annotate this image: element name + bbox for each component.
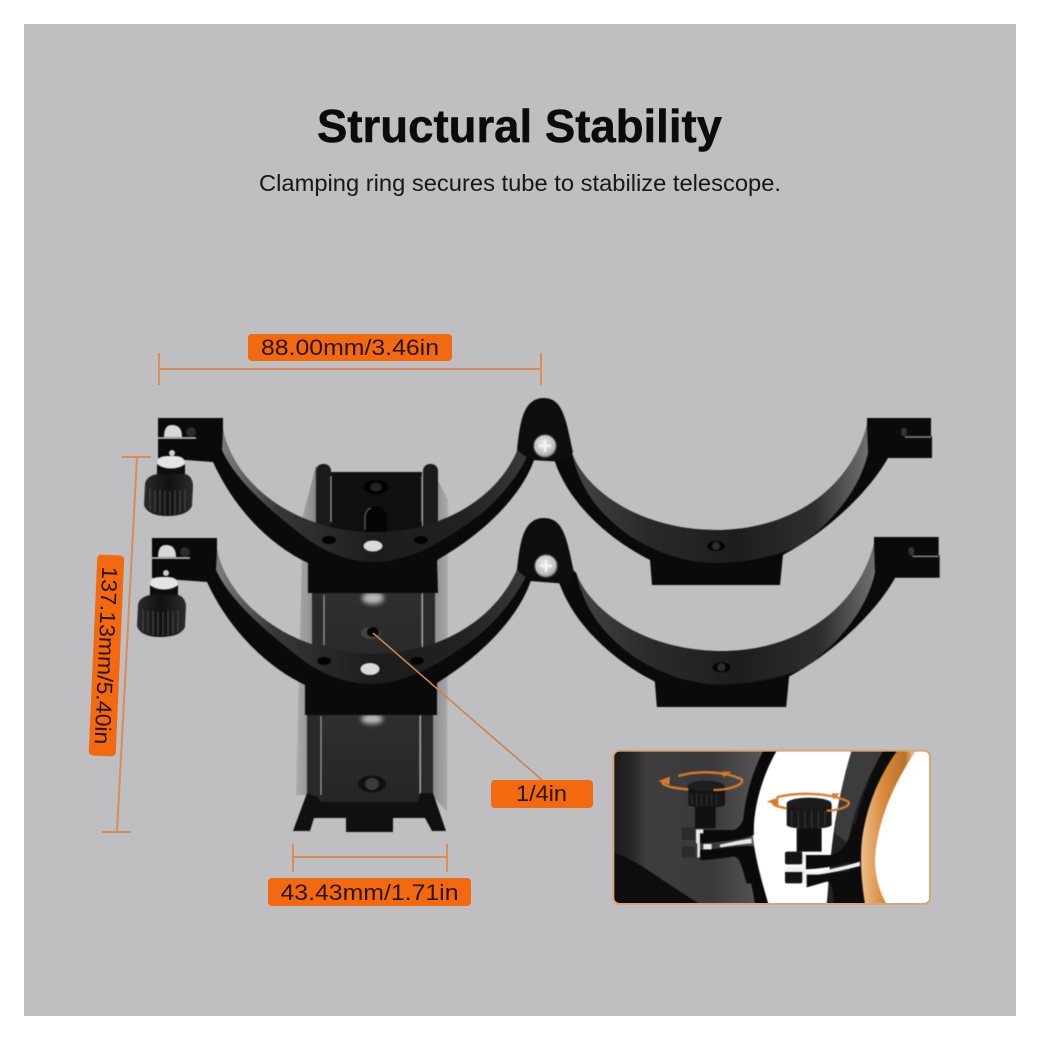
rotation arrow: right knob bbox=[767, 793, 849, 811]
ring left half bbox=[158, 418, 535, 593]
mount left side face bbox=[296, 466, 322, 795]
telescope mounting base bbox=[293, 464, 448, 832]
dimension: width 88.00mm: 88.00mm/3.46in bbox=[261, 335, 439, 360]
rotation arrow: left knob bbox=[658, 772, 742, 790]
inset second tube band bbox=[826, 752, 884, 903]
ring right half bbox=[555, 418, 932, 585]
inset black ring band bbox=[743, 751, 777, 904]
dimension: height 137.13mm: 137.13mm/5.40in bbox=[90, 566, 122, 745]
clamping ring: lower bbox=[137, 518, 940, 715]
lower hinge cylinder bbox=[517, 518, 574, 584]
inset background tube bbox=[752, 752, 929, 903]
dimension: width 88.00mm bbox=[159, 334, 541, 385]
subtitle: Clamping ring secures tube to stabilize telescope. bbox=[259, 170, 781, 196]
lower hinge screw bbox=[534, 554, 558, 578]
thumb knob bbox=[144, 456, 193, 516]
lower thumb knob bbox=[137, 577, 186, 637]
lower ring left half bbox=[152, 538, 532, 715]
clamping ring: upper bbox=[144, 398, 932, 593]
hinge screw bbox=[534, 434, 556, 458]
right knob with clamp bbox=[785, 798, 863, 904]
inset copper rim bbox=[861, 751, 916, 904]
dimension: height 137.13mm bbox=[89, 457, 151, 832]
dimension: base width 43.43mm bbox=[268, 844, 471, 906]
mount right side face bbox=[428, 466, 448, 812]
mount feet bbox=[293, 793, 446, 832]
callout: 1/4in screw hole bbox=[373, 633, 593, 808]
mount holes bbox=[358, 480, 388, 792]
hinge cylinder bbox=[517, 398, 573, 462]
title: Structural Stability bbox=[317, 100, 722, 152]
dimension: base width 43.43mm: 43.43mm/1.71in bbox=[280, 880, 458, 905]
lower ring right half bbox=[559, 537, 940, 707]
mount highlights bbox=[361, 592, 384, 724]
left knob with clamp bbox=[682, 781, 757, 883]
mount centre plate bbox=[307, 464, 438, 804]
inset photo: thumb knob tightening detail bbox=[613, 751, 930, 904]
callout: 1/4in screw hole: 1/4in bbox=[516, 781, 567, 806]
inset frame bbox=[613, 751, 930, 904]
